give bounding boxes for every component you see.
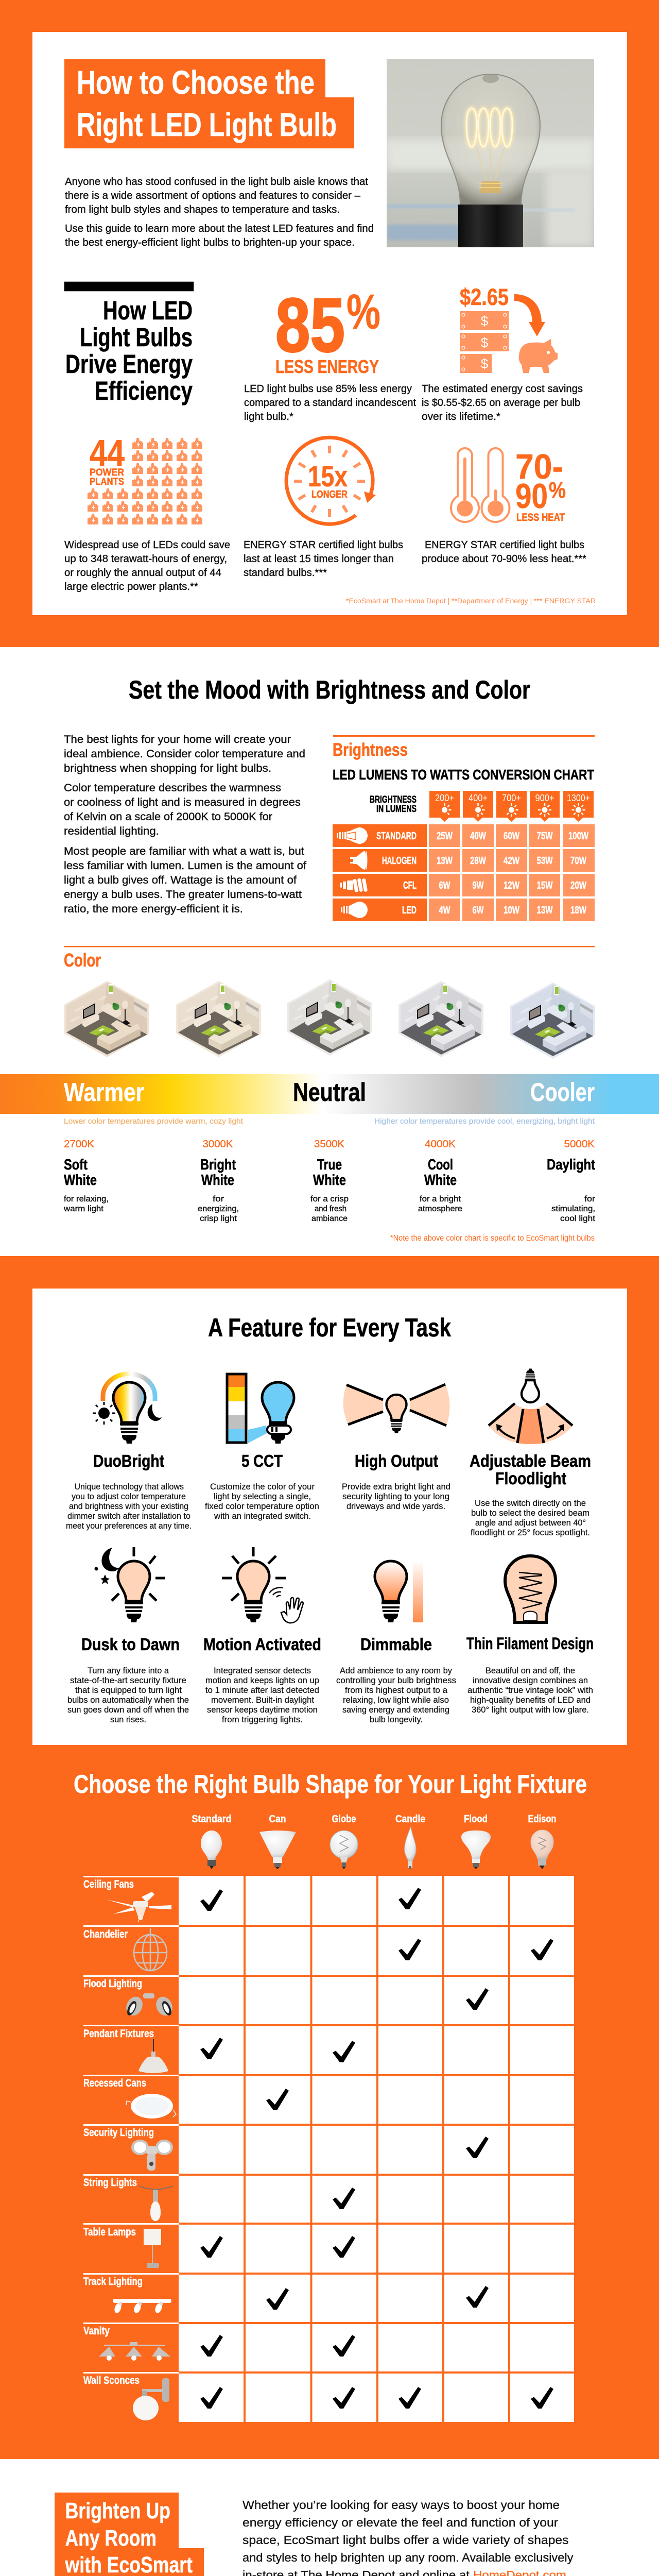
chart values: watts: 10W	[504, 905, 519, 916]
chart values: watts: 70W	[570, 855, 586, 867]
icon: ceiling fan	[107, 1892, 171, 1922]
text: Motion Activated description: from triggering lights.	[222, 1715, 303, 1724]
column: 3500K True White: 3500K	[314, 1139, 345, 1150]
illustration: cool room 5000K	[510, 982, 595, 1059]
intro text: from light bulb styles and shapes to temperature and tasks.	[65, 204, 340, 215]
text: DuoBright description	[66, 1482, 192, 1531]
bulb: candle	[405, 1827, 416, 1869]
text: closing paragraph	[242, 2498, 574, 2576]
stat: $2.65 savings icon with bills and piggy bank: $	[481, 356, 489, 371]
text: brightness and color explanation: or coolness of light and is measured in degrees	[64, 796, 301, 808]
column: 3000K Bright White: energizing,	[198, 1205, 239, 1213]
text: longevity description: last at least 15 times longer than	[244, 553, 394, 565]
stat: 44 power plants icon grid: PLANTS	[90, 477, 124, 487]
row: Flood Lighting	[83, 1978, 176, 2019]
chart values: watts: 9W	[473, 880, 484, 891]
feature: High Output: High Output	[355, 1451, 438, 1470]
text: brightness and color explanation: less familiar with lumen. Lumen is the amount of	[64, 860, 306, 872]
chart values: watts: 15W	[536, 880, 553, 891]
heading: lumens to watts chart: LED LUMENS TO WATTS CONVERSION CHART	[333, 767, 594, 783]
text: Motion Activated description: sensor keeps daytime motion	[207, 1705, 318, 1715]
closing callout: Brighten Up Any Room with EcoSmart: Brighten Up	[65, 2498, 170, 2523]
row: Wall Sconces	[83, 2375, 169, 2420]
bulb: globe	[330, 1831, 358, 1869]
footnote: sources: *EcoSmart at The Home Depot | **Department of Energy | *** ENERGY STAR	[346, 597, 596, 605]
scale: warmer to cooler band: Cooler	[530, 1078, 595, 1107]
footnote: color chart note: *Note the above color chart is specific to EcoSmart light bulbs	[390, 1234, 595, 1243]
column: 3000K Bright White: Bright	[200, 1157, 236, 1173]
feature: Dimmable: Dimmable	[360, 1635, 432, 1654]
stat: $2.65 savings icon with bills and piggy bank	[460, 284, 558, 373]
icon: color column and bulb with switch	[227, 1374, 294, 1444]
chart values: watts: 25W	[437, 831, 453, 842]
text: Dimmable description: saving energy and extending	[342, 1705, 449, 1715]
feature: DuoBright: DuoBright	[93, 1451, 164, 1470]
chart values: watts: 13W	[437, 855, 453, 867]
chart values: watts: 53W	[536, 855, 553, 867]
row: Vanity: Vanity	[83, 2325, 110, 2337]
closing callout: Brighten Up Any Room with EcoSmart: Any Room	[65, 2526, 157, 2551]
table: bulb column headers	[192, 1813, 556, 1869]
chart header: lumen levels: 700+	[502, 793, 521, 803]
row: Track Lighting	[83, 2276, 171, 2314]
feature: DuoBright	[66, 1374, 192, 1531]
feature: Motion Activated	[203, 1547, 321, 1724]
table: grid cells	[179, 1876, 574, 2422]
icon: table lamp	[144, 2229, 161, 2268]
text: Dusk to Dawn description: sun rises.	[110, 1715, 146, 1724]
column: 2700K Soft White: White	[64, 1172, 97, 1189]
heading: Brightness: Brightness	[333, 740, 408, 760]
table: check marks	[200, 1888, 553, 2409]
row: Ceiling Fans	[83, 1878, 171, 1922]
icon: bulb with moon and star	[95, 1547, 165, 1622]
text: High Output description: security lighting to your long	[342, 1492, 449, 1501]
chart values: watts: 6W	[439, 880, 450, 891]
stat: $2.65 savings icon with bills and piggy bank: $	[481, 335, 489, 350]
stat: 85% less energy: LESS ENERGY	[275, 356, 379, 377]
text: power plant description	[64, 539, 230, 592]
text: Motion Activated description: motion and keeps lights on up	[205, 1675, 319, 1685]
text: High Output description	[342, 1482, 450, 1511]
chart header: lumen levels: 1300+	[567, 793, 590, 803]
text: power plant description: Widespread use of LEDs could save	[64, 539, 230, 551]
stat: 70-90% less heat thermometers: LESS HEAT	[516, 512, 565, 523]
section: features background	[0, 1256, 659, 2459]
stat: 15x longer clock icon: 15x	[308, 460, 348, 493]
bulb: edison	[531, 1830, 553, 1869]
column: 5000K Daylight: stimulating,	[551, 1205, 595, 1213]
column: 4000K Cool White: 4000K	[425, 1139, 456, 1150]
text: 5 CCT description: light by selecting a single,	[214, 1492, 311, 1501]
text: DuoBright description: and brightness with your existing	[69, 1501, 188, 1511]
text: closing paragraph: and styles to help brighten up any room. Available exclusively	[242, 2551, 574, 2564]
text: brightness and color explanation: energy a bulb uses. The greater lumens-to-watt	[64, 889, 302, 901]
stat: 15x longer clock icon	[286, 437, 376, 524]
text: Motion Activated description: movement. Built-in daylight	[211, 1695, 314, 1705]
text: longevity description: standard bulbs.***	[244, 567, 327, 579]
column: 4000K Cool White: for a bright	[420, 1195, 461, 1204]
text: heat description: produce about 70-90% less heat.***	[422, 553, 586, 565]
text: DuoBright description: meet your preferences at any time.	[66, 1521, 192, 1531]
scale: warmer to cooler band: Neutral	[293, 1078, 366, 1107]
icon: bulb with hand and sensor waves	[222, 1547, 303, 1623]
column: 4000K Cool White	[418, 1139, 462, 1213]
text: DuoBright description: you to adjust color temperature	[72, 1492, 186, 1501]
column: 3500K True White: for a crisp	[310, 1195, 349, 1204]
illustration: room 4000K	[398, 981, 483, 1057]
title: How to Choose the Right LED Light Bulb: How to Choose the	[77, 64, 315, 101]
intro text: there is a wide assortment of options and features to consider –	[65, 190, 361, 201]
icon: pendant lamp	[138, 2039, 168, 2073]
chart values: watts	[429, 824, 595, 921]
text: Dimmable description: controlling your bulb brightness	[336, 1675, 456, 1685]
chart values: watts: 12W	[504, 880, 519, 891]
icon: track lighting	[113, 2299, 171, 2314]
text: power plant description: large electric power plants.**	[64, 581, 198, 592]
column: 5000K Daylight	[547, 1139, 596, 1223]
text: Thin Filament description: high-quality benefits of LED and	[470, 1695, 591, 1705]
bulb: flood	[461, 1831, 491, 1869]
row: Flood Lighting: Flood Lighting	[83, 1978, 142, 1990]
stat: 70-90% less heat thermometers: 90	[515, 477, 548, 516]
stat: 44 power plants icon grid: POWER	[90, 467, 124, 478]
row: Wall Sconces: Wall Sconces	[83, 2375, 140, 2386]
chart header: lumen levels: 400+	[469, 793, 488, 803]
text: Dusk to Dawn description: bulbs on automatically when the	[67, 1695, 189, 1705]
caption: warm temperatures: Lower color temperatures provide warm, cozy light	[64, 1117, 244, 1126]
text: 85% description: light bulb.*	[244, 411, 293, 422]
bulb: can	[259, 1831, 296, 1869]
row: Vanity	[83, 2325, 170, 2361]
row: Pendant Fixtures: Pendant Fixtures	[83, 2028, 154, 2040]
column: 2700K Soft White	[63, 1139, 109, 1213]
chart rows: bulb type labels: STANDARD	[376, 831, 417, 842]
icon: filament bulb	[505, 1556, 556, 1622]
row: Pendant Fixtures	[83, 2028, 168, 2073]
text: brightness and color explanation: residential lighting.	[64, 825, 159, 837]
text: Dimmable description: from its highest output to a	[345, 1685, 448, 1695]
column: 2700K Soft White: Soft	[64, 1157, 88, 1173]
column: 3500K True White: True	[317, 1157, 342, 1173]
intro text: the best energy-efficient light bulbs to brighten-up your space.	[65, 237, 355, 248]
icon: DuoBright bulb with sun and moon	[93, 1374, 162, 1444]
chart values: watts: 75W	[536, 831, 553, 842]
column: 2700K Soft White: 2700K	[64, 1139, 95, 1150]
heading: How LED Light Bulbs Drive Energy Efficiency: How LED	[103, 296, 193, 325]
title: How to Choose the Right LED Light Bulb: Right LED Light Bulb	[77, 106, 337, 143]
stat: 44 power plants icon grid: 44	[90, 433, 125, 474]
icon: security light	[131, 2140, 173, 2171]
text: brightness and color explanation: ratio, the more energy-efficient it is.	[64, 903, 243, 915]
column: 4000K Cool White: Cool	[428, 1157, 453, 1173]
text: Dusk to Dawn description	[67, 1666, 189, 1724]
text: Adjustable Beam description: bulb to select the desired beam	[471, 1508, 589, 1518]
text: brightness and color explanation: of Kelvin on a scale of 2000K to 5000K for	[64, 811, 272, 823]
row: Table Lamps: Table Lamps	[83, 2226, 136, 2238]
illustration: room 3000K	[176, 981, 261, 1057]
chart values: watts: 6W	[473, 905, 484, 916]
column: 3500K True White: White	[313, 1172, 346, 1189]
chart values: watts: 4W	[439, 905, 450, 916]
feature: 5 CCT	[205, 1374, 319, 1521]
intro text: Anyone who has stood confused in the light bulb aisle knows that	[65, 176, 368, 188]
feature: Motion Activated: Motion Activated	[203, 1635, 321, 1654]
text: Adjustable Beam description: Use the switch directly on the	[475, 1498, 586, 1508]
text: longevity description	[244, 539, 403, 579]
panel: brightness chart	[333, 735, 595, 921]
heading: How LED Light Bulbs Drive Energy Efficiency: Light Bulbs	[80, 323, 193, 352]
text: Thin Filament description: innovative design combines an	[473, 1675, 588, 1685]
column: 5000K Daylight: for	[584, 1195, 596, 1204]
text: Motion Activated description: to 1 minute after last detected	[205, 1685, 319, 1695]
table: bulb column headers: Edison	[528, 1813, 556, 1825]
chart values: watts: 20W	[570, 880, 586, 891]
stat: 70-90% less heat thermometers: 70-	[515, 447, 563, 486]
column: 3500K True White: and fresh	[315, 1205, 346, 1213]
text: savings description: over its lifetime.*	[422, 411, 500, 422]
chart rows: bulb type labels: HALOGEN	[382, 855, 417, 867]
row: Recessed Cans: Recessed Cans	[83, 2077, 146, 2089]
stat: 70-90% less heat thermometers: %	[549, 478, 566, 503]
text: 5 CCT description	[205, 1482, 319, 1521]
illustration: room 3500K	[287, 979, 372, 1056]
row: String Lights	[83, 2177, 173, 2221]
row: String Lights: String Lights	[83, 2177, 137, 2189]
text: Dimmable description: relaxing, low light while also	[343, 1695, 449, 1705]
text: Thin Filament description	[467, 1666, 593, 1715]
text: brightness and color explanation: light a bulb gives off. Wattage is the amount of	[64, 874, 297, 886]
chart header: lumen levels: 200+	[435, 793, 454, 803]
caption: cool temperatures: Higher color temperatures provide cool, energizing, bright light	[374, 1117, 595, 1126]
heading: Set the Mood with Brightness and Color: Set the Mood with Brightness and Color	[129, 675, 530, 704]
chart axis label	[370, 794, 417, 815]
text: High Output description: Provide extra bright light and	[342, 1482, 450, 1492]
chart rows: bulb type labels	[333, 824, 427, 921]
chart values: watts: 42W	[504, 855, 519, 867]
chart values: watts: 60W	[504, 831, 519, 842]
row: Table Lamps	[83, 2226, 161, 2268]
text: Motion Activated description: Integrated sensor detects	[214, 1666, 311, 1675]
scale: warmer to cooler band: Warmer	[64, 1078, 144, 1107]
feature: Adjustable Beam Floodlight: Adjustable Beam	[470, 1451, 591, 1470]
table: bulb column headers: Globe	[332, 1813, 356, 1825]
column: 5000K Daylight: cool light	[560, 1214, 596, 1223]
stat: 15x longer clock icon: LONGER	[311, 489, 348, 500]
icon: string light bulb	[139, 2186, 173, 2221]
text: savings description: is $0.55-$2.65 on average per bulb	[422, 397, 580, 409]
panel: color	[0, 946, 659, 1243]
feature: High Output	[342, 1384, 450, 1511]
icon: inverted bulb with adjustable beam	[489, 1369, 573, 1444]
text: power plant description: up to 348 terawatt-hours of energy,	[64, 553, 227, 565]
heading: How LED Light Bulbs Drive Energy Efficiency	[64, 282, 194, 405]
row: Track Lighting: Track Lighting	[83, 2276, 143, 2287]
text: longevity description: ENERGY STAR certified light bulbs	[244, 539, 403, 551]
text: Adjustable Beam description: angle and adjust between 40°	[475, 1518, 586, 1528]
chart values: watts: 18W	[570, 905, 586, 916]
text: 5 CCT description: Customize the color of your	[210, 1482, 315, 1492]
icon: flood lights	[123, 1993, 176, 2019]
scale: warmer to cooler band	[0, 1074, 659, 1114]
text: Dimmable description: bulb longevity.	[370, 1715, 423, 1724]
row: Security Lighting	[83, 2127, 173, 2171]
chart values: watts: 100W	[568, 831, 588, 842]
text: brightness and color explanation: ideal ambience. Consider color temperature and	[64, 748, 305, 760]
row: Security Lighting: Security Lighting	[83, 2127, 154, 2139]
feature: Thin Filament Design: Thin Filament Design	[466, 1634, 594, 1653]
text: Thin Filament description: 360° light output with low glare.	[472, 1705, 589, 1715]
column: 2700K Soft White: for relaxing,	[64, 1195, 109, 1204]
text: brightness and color explanation: Most people are familiar with what a watt is, but	[64, 845, 304, 857]
photo: vintage filament bulb	[387, 59, 594, 247]
text: DuoBright description: Unique technology that allows	[74, 1482, 184, 1492]
title: How to Choose the Right LED Light Bulb	[64, 59, 354, 148]
text: Motion Activated description	[205, 1666, 319, 1724]
chart axis label: IN LUMENS	[376, 804, 417, 815]
text: 85% description: LED light bulbs use 85% less energy	[244, 383, 412, 395]
column: 5000K Daylight: Daylight	[547, 1157, 595, 1173]
intro text	[65, 176, 374, 248]
illustration: warm room 2700K	[64, 981, 149, 1057]
text: heat description	[422, 539, 586, 565]
text: brightness and color explanation: brightness when shopping for light bulbs.	[64, 762, 271, 774]
stat: 85% less energy: %	[346, 284, 380, 340]
column: 4000K Cool White: atmosphere	[418, 1205, 462, 1213]
chart values: watts: 28W	[470, 855, 486, 867]
table: bulb column headers: Flood	[464, 1813, 488, 1825]
chart rows: bulb type labels: CFL	[403, 880, 417, 891]
column: 3500K True White: ambiance	[311, 1214, 348, 1223]
column: 5000K Daylight: 5000K	[564, 1139, 595, 1150]
text: closing paragraph: space, EcoSmart light bulbs offer a wide variety of shapes	[242, 2533, 568, 2547]
column: 3000K Bright White: for	[213, 1195, 224, 1204]
icon: wall sconce	[133, 2378, 169, 2420]
feature: Dimmable	[336, 1561, 456, 1724]
chart rows: bulb type labels: LED	[402, 905, 417, 916]
text: High Output description: driveways and wide yards.	[346, 1501, 445, 1511]
stat: 70-90% less heat thermometers	[451, 447, 566, 523]
row: Ceiling Fans: Ceiling Fans	[83, 1878, 134, 1890]
column: 4000K Cool White: White	[424, 1172, 457, 1189]
closing callout: Brighten Up Any Room with EcoSmart	[55, 2493, 204, 2576]
stat: 85% less energy: 85	[275, 283, 345, 368]
text: Dusk to Dawn description: that is equipped to turn light	[75, 1685, 182, 1695]
text: 85% description: compared to a standard incandescent	[244, 397, 416, 409]
text: closing paragraph: Whether you’re looking for easy ways to boost your home	[242, 2498, 560, 2512]
text: Adjustable Beam description: floodlight or 25° focus spotlight.	[471, 1528, 590, 1537]
text: heat description: ENERGY STAR certified light bulbs	[425, 539, 584, 551]
intro text: Use this guide to learn more about the latest LED features and find	[65, 223, 374, 234]
table: bulb column headers: Can	[269, 1813, 286, 1825]
chart header: lumen levels	[429, 791, 594, 822]
feature: Adjustable Beam Floodlight: Floodlight	[495, 1469, 566, 1488]
heading: How LED Light Bulbs Drive Energy Efficiency: Drive Energy	[65, 349, 193, 379]
text: 5 CCT description: fixed color temperature option	[205, 1501, 319, 1511]
feature: Dusk to Dawn	[67, 1547, 189, 1724]
chart values: watts: 40W	[470, 831, 486, 842]
table: bulb column headers: Candle	[395, 1813, 425, 1825]
feature: Adjustable Beam Floodlight	[470, 1369, 591, 1537]
text: brightness and color explanation: Color temperature describes the warmness	[64, 782, 281, 794]
stat: $2.65 savings icon with bills and piggy bank: $	[481, 313, 489, 329]
bulb: standard	[201, 1831, 222, 1869]
feature: Thin Filament Design	[466, 1556, 594, 1715]
icon: dimmable bulb and gradient bar	[375, 1561, 423, 1622]
icon: vanity fixture	[99, 2342, 170, 2361]
feature: 5 CCT: 5 CCT	[241, 1451, 283, 1470]
row: Recessed Cans	[83, 2077, 176, 2119]
text: power plant description: or roughly the annual output of 44	[64, 567, 221, 579]
feature: Dusk to Dawn: Dusk to Dawn	[81, 1635, 180, 1654]
icon: bulb with wide beams	[343, 1384, 450, 1433]
column: 3000K Bright White: crisp light	[200, 1214, 237, 1223]
stat: $2.65 savings icon with bills and piggy bank: $2.65	[460, 284, 509, 310]
column: 3000K Bright White	[198, 1139, 239, 1223]
heading: Color: Color	[64, 950, 101, 971]
text: Dusk to Dawn description: sun goes down and off when the	[67, 1705, 189, 1715]
heading: A Feature for Every Task: A Feature for Every Task	[208, 1313, 451, 1342]
text: Dusk to Dawn description: state-of-the-art security fixture	[70, 1675, 186, 1685]
text: Thin Filament description: Beautiful on and off, the	[485, 1666, 575, 1675]
row: Chandelier: Chandelier	[83, 1928, 128, 1940]
text: Dusk to Dawn description: Turn any fixture into a	[88, 1666, 169, 1675]
chart header: lumen levels: 900+	[535, 793, 554, 803]
icon: chandelier cage	[134, 1928, 167, 1971]
column: 3000K Bright White: 3000K	[203, 1139, 233, 1150]
table: row dividers	[83, 1876, 179, 2374]
chart values: watts: 13W	[536, 905, 553, 916]
text: closing paragraph: energy efficiency or elevate the feel and function of your	[242, 2516, 558, 2529]
text: savings description: The estimated energy cost savings	[422, 383, 583, 395]
text: Adjustable Beam description	[471, 1498, 590, 1537]
text: DuoBright description: dimmer switch after installation to	[67, 1511, 190, 1521]
column: 3500K True White	[310, 1139, 349, 1223]
text: Dimmable description: Add ambience to any room by	[340, 1666, 452, 1675]
text: 5 CCT description: with an integrated switch.	[214, 1511, 311, 1521]
heading: How LED Light Bulbs Drive Energy Efficiency: Efficiency	[95, 376, 193, 405]
text: 85% description	[244, 383, 416, 422]
column: 3000K Bright White: White	[201, 1172, 234, 1189]
text: brightness and color explanation: The best lights for your home will create your	[64, 734, 291, 745]
text: Dimmable description	[336, 1666, 456, 1724]
text: savings description	[422, 383, 583, 422]
table: bulb column headers: Standard	[192, 1813, 232, 1825]
text: Thin Filament description: authentic “true vintage look” with	[467, 1685, 593, 1695]
text: brightness and color explanation	[64, 734, 306, 915]
column: 2700K Soft White: warm light	[63, 1205, 104, 1213]
stat: 44 power plants icon grid	[88, 433, 202, 524]
chart axis label: BRIGHTNESS	[370, 794, 417, 805]
row: Chandelier	[83, 1928, 167, 1971]
icon: recessed light	[126, 2094, 176, 2119]
